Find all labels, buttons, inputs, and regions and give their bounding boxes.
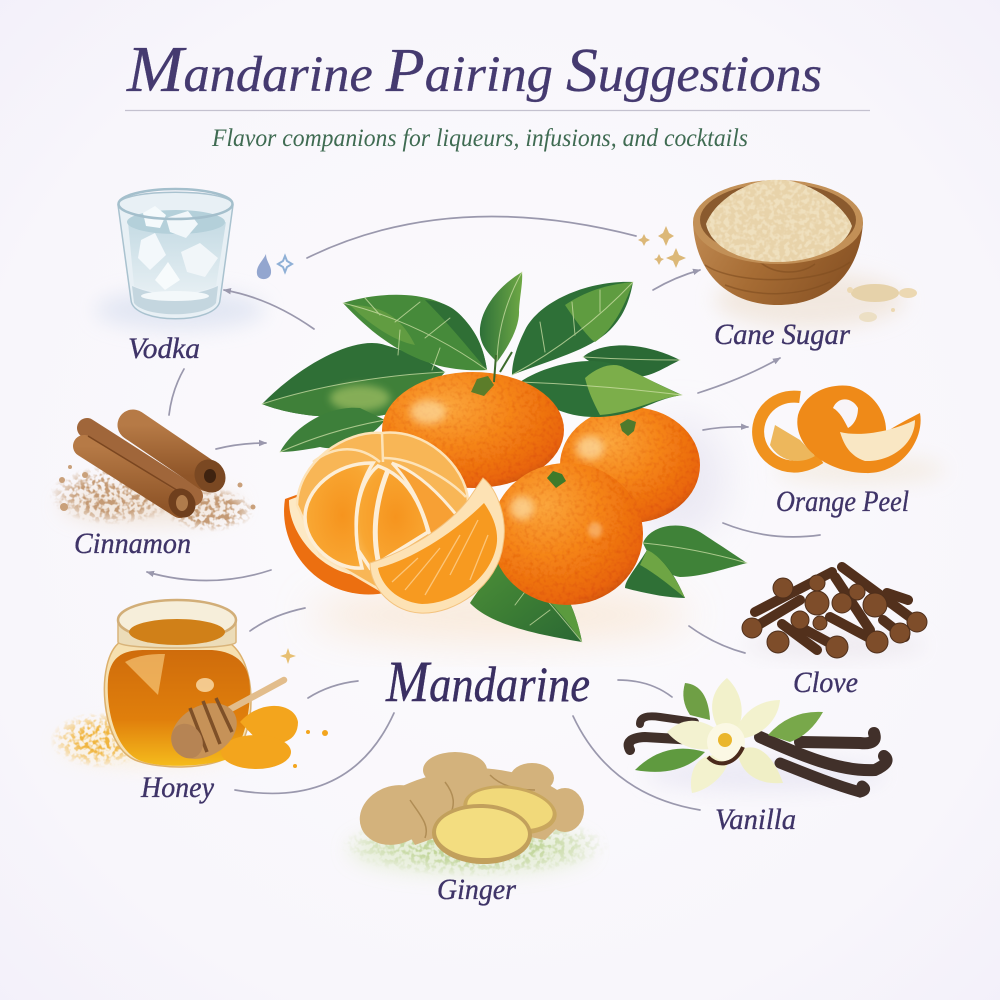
vodka glass	[118, 189, 233, 319]
honey jar	[104, 600, 251, 767]
title divider	[125, 110, 870, 112]
orange: top	[382, 352, 564, 488]
orange: front	[491, 463, 643, 605]
orange peel	[758, 385, 921, 473]
watercolor washes	[60, 272, 945, 874]
leaf over right orange	[520, 361, 682, 417]
vanilla pods and flower	[629, 678, 887, 793]
subtitle: Flavor companions for liqueurs, infusions, and cocktails	[211, 125, 748, 152]
honey spill speckles	[50, 712, 150, 768]
cinnamon sticks	[84, 425, 231, 522]
label: Vodka: Vodka	[128, 332, 200, 365]
sparkle near honey	[280, 648, 296, 664]
sparkles near sugar	[638, 226, 686, 268]
label: Cinnamon: Cinnamon	[74, 527, 191, 560]
cloves	[742, 567, 927, 658]
label: Honey: Honey	[140, 771, 215, 804]
orange: right	[560, 407, 700, 523]
honey dipper	[161, 680, 284, 770]
droplet and sparkle near vodka	[257, 254, 292, 279]
ginger speckles	[340, 813, 610, 877]
title: Mandarine Pairing Suggestions	[126, 33, 822, 106]
label: Orange Peel: Orange Peel	[776, 485, 909, 518]
cane sugar bowl	[693, 180, 863, 305]
mandarin wedge	[370, 478, 504, 613]
spilled sugar crystals	[847, 284, 917, 322]
center label: Mandarine: Mandarine	[385, 649, 590, 714]
lower leaves	[470, 525, 747, 642]
connector lines and arrows	[147, 216, 820, 810]
peeled mandarin	[284, 433, 468, 594]
label: Cane Sugar: Cane Sugar	[714, 318, 850, 351]
central mandarin illustration	[262, 272, 747, 642]
leaves behind fruit	[262, 272, 680, 452]
label: Vanilla: Vanilla	[715, 803, 796, 836]
label: Clove: Clove	[793, 666, 858, 699]
label: Ginger: Ginger	[437, 873, 516, 906]
honey puddle	[221, 706, 328, 769]
ginger	[351, 752, 584, 866]
cinnamon powder	[49, 465, 256, 532]
